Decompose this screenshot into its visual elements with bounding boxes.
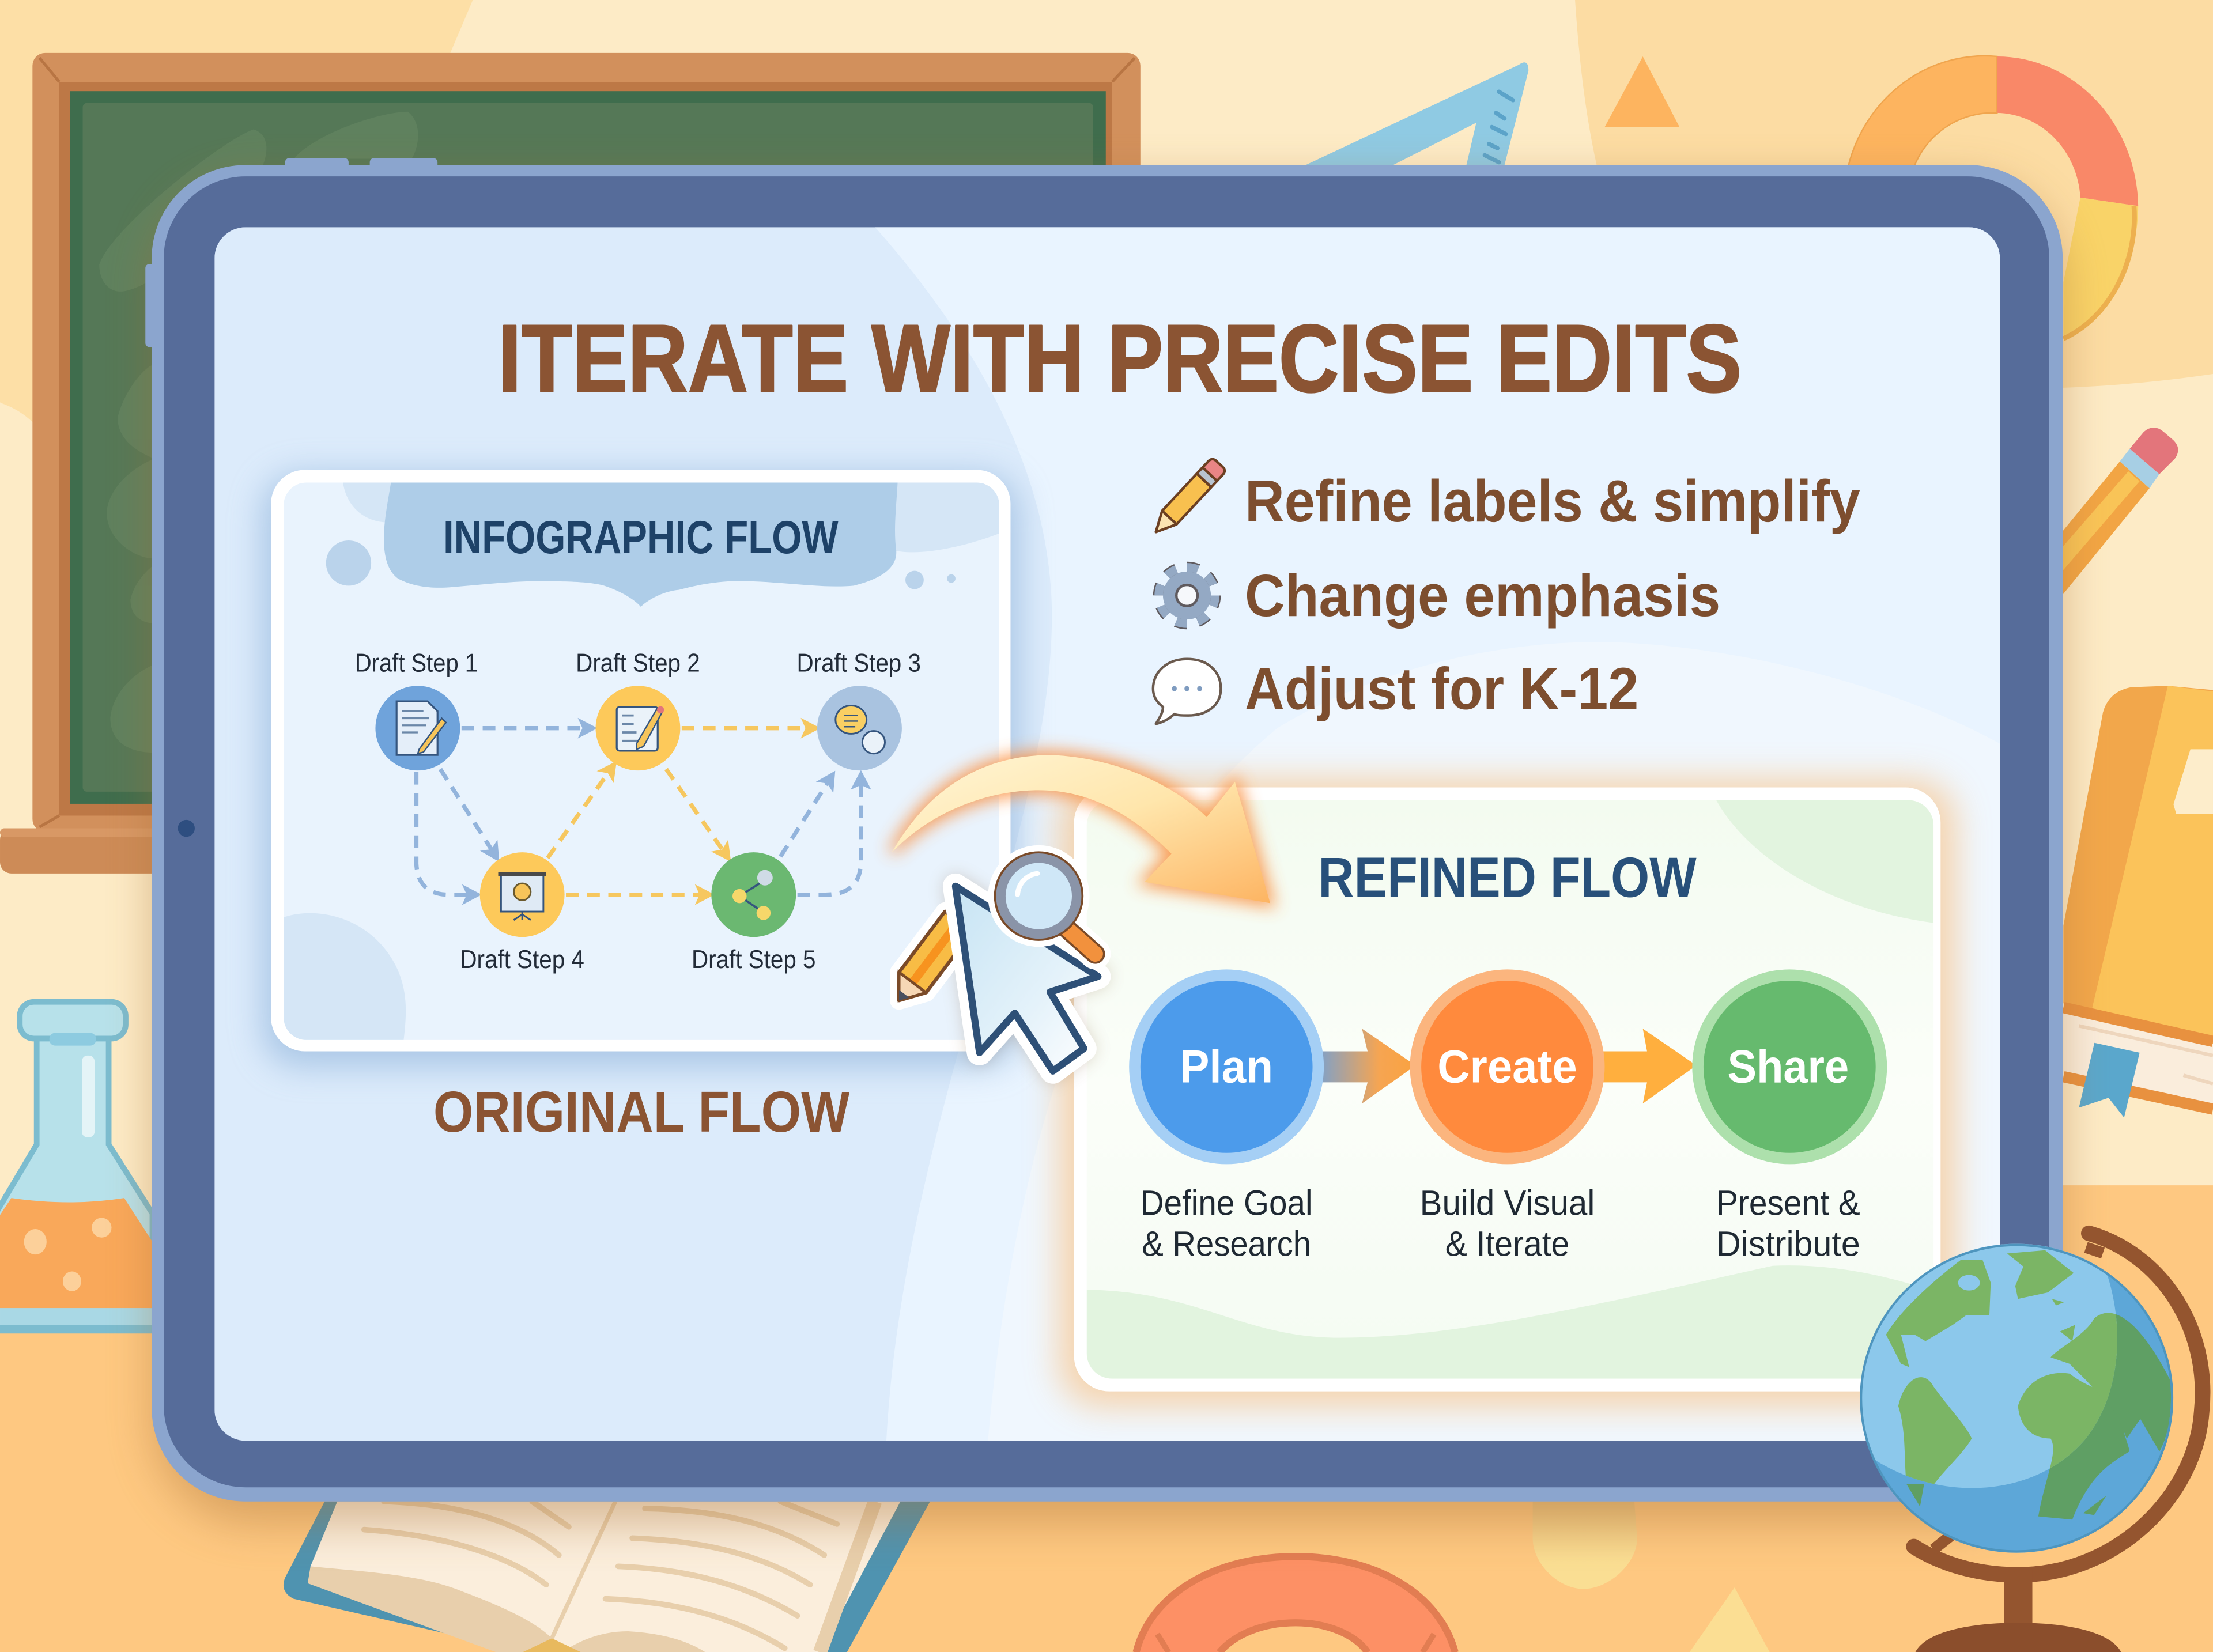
node: create: Create	[1437, 1041, 1577, 1092]
node: share	[1692, 969, 1887, 1164]
arrow: create to share	[1595, 1029, 1697, 1103]
lab flask	[0, 1002, 153, 1332]
globe	[1855, 1218, 2203, 1652]
node: create	[1410, 969, 1604, 1164]
node: share: Share	[1728, 1041, 1849, 1092]
shaded continents	[1906, 1313, 2171, 1519]
icon: pencil	[1149, 457, 1226, 539]
step captions: Present &	[1716, 1184, 1860, 1223]
floor triangle	[1689, 1587, 1770, 1652]
arrow: plan to create	[1311, 1029, 1415, 1103]
editing tools: cursor, magnifier, pencil	[886, 845, 1098, 1071]
arrow: original to refined	[892, 755, 1270, 903]
panel frame	[271, 470, 1010, 1051]
list text: adjust for K-12: Adjust for K-12	[1245, 656, 1638, 722]
peg shape on the floor	[1533, 1502, 1637, 1589]
green decorative shapes	[1087, 800, 1933, 1379]
icon: magnifier	[988, 845, 1095, 954]
small orange triangle	[1604, 56, 1679, 127]
step captions: Distribute	[1716, 1224, 1860, 1264]
screen	[214, 227, 2000, 1441]
node labels: Draft Step 5	[692, 946, 816, 974]
step captions	[1141, 1184, 1860, 1264]
panel heading: INFOGRAPHIC FLOW	[443, 512, 839, 564]
tablet frame	[152, 165, 2063, 1502]
donut chart decoration	[1846, 56, 2138, 339]
panel: refined flow	[1059, 779, 1956, 1407]
tablet	[145, 158, 2063, 1524]
icon: cursor	[956, 886, 1098, 1071]
node: draft step 3	[817, 686, 902, 770]
panel: original flow	[263, 470, 1019, 1067]
panel glow	[1059, 779, 1956, 1407]
node: draft step 5	[711, 852, 796, 937]
panel frame	[1074, 788, 1940, 1392]
chalkboard	[0, 53, 1141, 874]
triangle ruler	[1305, 62, 1528, 165]
node: draft step 4	[480, 852, 565, 937]
edit list	[1149, 457, 1860, 724]
tablet shadow	[153, 180, 2063, 1524]
lit hemisphere	[1855, 1218, 2171, 1529]
node labels: Draft Step 1	[355, 649, 478, 678]
globe stand	[1914, 1233, 2203, 1652]
original flow caption: ORIGINAL FLOW	[433, 1080, 850, 1144]
node labels: Draft Step 3	[796, 649, 921, 678]
closed book on the right	[2063, 686, 2213, 1118]
banner blob	[384, 483, 898, 607]
step captions: & Iterate	[1445, 1224, 1569, 1264]
camera dot	[178, 820, 195, 837]
node: plan	[1129, 969, 1324, 1164]
step captions: Build Visual	[1420, 1184, 1595, 1223]
node labels: Draft Step 4	[460, 946, 584, 974]
tablet buttons	[145, 158, 437, 347]
globe sphere	[1855, 1218, 2173, 1553]
icon: pencil	[886, 912, 972, 1011]
panel heading: REFINED FLOW	[1318, 845, 1697, 909]
decorative blobs	[284, 483, 999, 1040]
node: plan: Plan	[1180, 1041, 1273, 1092]
protractor arch on the floor	[1136, 1556, 1455, 1652]
node: draft step 2	[595, 686, 680, 770]
dashed flow arrows	[416, 728, 861, 895]
step captions: Define Goal	[1141, 1184, 1313, 1223]
icon: speech bubble	[1153, 659, 1221, 724]
panel shadow	[263, 474, 1019, 1067]
list text: change emphasis: Change emphasis	[1245, 562, 1720, 629]
node labels	[355, 649, 921, 974]
wall pencil	[2062, 428, 2178, 595]
step captions: & Research	[1142, 1224, 1311, 1264]
list text: refine labels: Refine labels & simplify	[1245, 468, 1860, 534]
tool shadow	[956, 886, 1098, 1071]
node labels: Draft Step 2	[576, 649, 700, 678]
floor	[0, 1185, 2213, 1652]
node: draft step 1	[375, 686, 460, 770]
title: ITERATE WITH PRECISE EDITS	[498, 305, 1742, 413]
icon: gear	[1159, 567, 1215, 623]
open book on the floor	[284, 1502, 930, 1652]
